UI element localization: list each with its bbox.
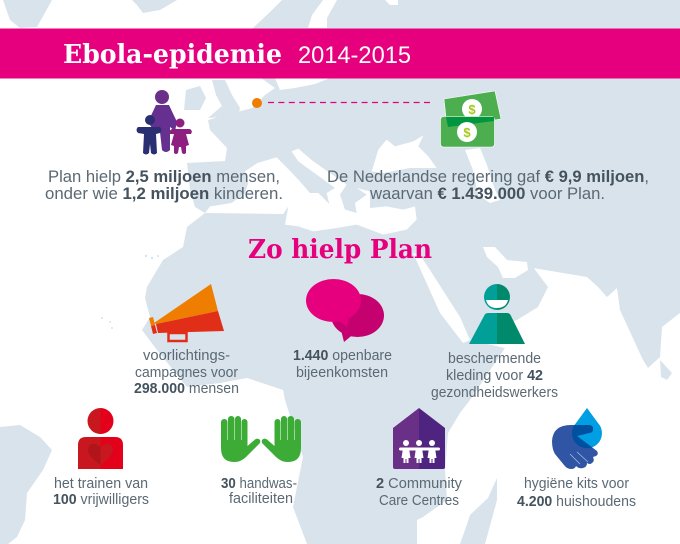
heading: Zo hielp Plan: Zo hielp Plan [248, 235, 432, 265]
icon: banknotes: $ [468, 102, 476, 117]
item: hygiene kits: hygiëne kits voor [524, 476, 629, 492]
item: protective clothing: gezondheidswerkers [431, 385, 558, 401]
icon: two hands [221, 416, 301, 462]
item: community care centres: Care Centres [379, 493, 459, 509]
item: training volunteers: 100 vrijwilligers [53, 492, 149, 508]
text: government funding [327, 167, 649, 203]
text: government funding: waarvan € 1.439.000 voor Plan. [369, 184, 605, 203]
text: government funding: De Nederlandse regering gaf € 9,9 miljoen, [327, 167, 649, 186]
item: handwashing facilities [221, 476, 297, 507]
item: training volunteers [53, 476, 149, 508]
item: protective clothing: kleding voor 42 [446, 368, 543, 384]
item: hygiene kits: 4.200 huishoudens [517, 494, 636, 510]
item: handwashing facilities: 30 handwas- [221, 476, 297, 492]
icon: banknotes: $ [463, 125, 471, 140]
text: people helped: onder wie 1,2 miljoen kinderen. [45, 184, 283, 203]
item: protective clothing: beschermende [448, 351, 541, 367]
text: people helped: Plan hielp 2,5 miljoen mensen, [48, 167, 280, 186]
item: hygiene kits [517, 476, 636, 510]
icon: water drop and hands [552, 408, 602, 469]
item: information campaigns: 298.000 mensen [134, 381, 239, 397]
item: information campaigns: voorlichtings- [143, 348, 230, 364]
item: community care centres [376, 476, 463, 509]
icon: banknotes [440, 91, 501, 147]
title banner [0, 28, 680, 78]
icon: megaphone [149, 284, 224, 341]
subtitle years: 2014-2015 [298, 42, 411, 69]
item: handwashing facilities: faciliteiten [229, 491, 293, 507]
item: protective clothing [431, 351, 558, 401]
icon: health worker [469, 284, 525, 344]
route marker: orange dot and dashed line [252, 98, 430, 108]
icon: volunteer with heart [78, 408, 123, 469]
item: public meetings: bijeenkomsten [296, 365, 388, 381]
item: public meetings [293, 348, 392, 381]
item: training volunteers: het trainen van [54, 476, 148, 492]
item: information campaigns [134, 348, 239, 397]
icon: family [136, 90, 192, 154]
item: community care centres: 2 Community [376, 476, 463, 492]
text: people helped [45, 167, 283, 203]
icon: community care centre house [393, 408, 445, 469]
item: information campaigns: campagnes voor [135, 365, 238, 381]
item: public meetings: 1.440 openbare [293, 348, 392, 364]
title: Ebola-epidemie [63, 40, 282, 70]
icon: speech bubbles [306, 279, 384, 342]
